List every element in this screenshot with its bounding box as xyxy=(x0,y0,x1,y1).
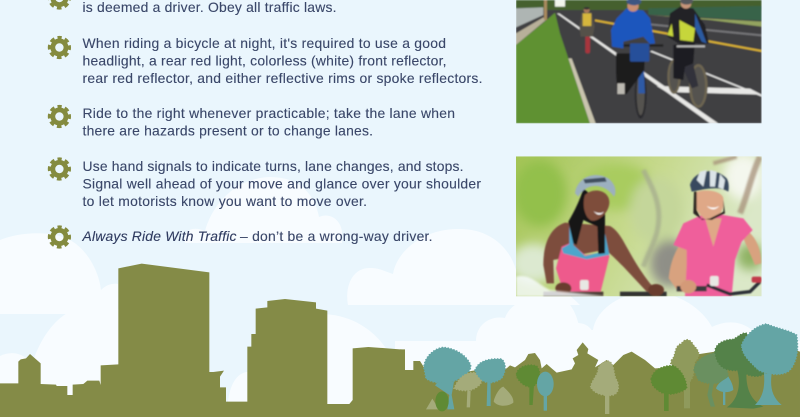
tree: teal xyxy=(475,359,505,406)
cloud fade over photo corner xyxy=(516,276,610,297)
far cyclist xyxy=(579,7,595,53)
rule 4: hand signals: Signal well ahead of your move and glance over your shoulder xyxy=(82,176,481,192)
rule 2: night riding equipment: headlight, a rear red light, colorless (white) front reflector, xyxy=(82,52,446,68)
icon: gear bullet xyxy=(49,227,69,247)
rule 4: hand signals: Use hand signals to indicate turns, lane changes, and stops. xyxy=(82,158,464,174)
rule 5: always ride with traffic: – don’t be a wrong-way driver. xyxy=(240,228,432,244)
tree: small teal xyxy=(716,377,733,405)
icon: gear bullet xyxy=(49,106,69,126)
tree: green xyxy=(517,365,540,405)
rule 4: hand signals xyxy=(49,158,481,209)
tree: olive triangle round xyxy=(494,387,513,406)
tree: large teal xyxy=(424,347,471,409)
rule 2: night riding equipment xyxy=(49,35,483,86)
tree: dark green small xyxy=(435,391,449,411)
photo: cyclists riding in a bike lane xyxy=(516,0,762,123)
rule 3: ride to the right: Ride to the right whenever practicable; take the lane when xyxy=(82,105,455,121)
tree: green round xyxy=(651,366,687,411)
bicycle: blue jacket rider xyxy=(611,0,663,119)
bicycle: reflective vest rider xyxy=(667,0,709,108)
tree: small olive triangle xyxy=(426,399,439,409)
icon: gear bullet xyxy=(49,38,69,58)
rule 3: ride to the right: there are hazards present or to change lanes. xyxy=(82,122,373,138)
text block: bicycle rules xyxy=(49,0,483,247)
rule 2: night riding equipment: When riding a bicycle at night, it's required to use a good xyxy=(82,35,446,51)
right rider xyxy=(669,170,762,296)
ground and tree-line silhouette xyxy=(400,324,800,417)
left rider xyxy=(543,175,667,296)
tree: grey-green xyxy=(694,353,728,407)
tree: teal slim xyxy=(537,372,554,411)
rule 4: hand signals: to let motorists know you want to move over. xyxy=(82,193,367,209)
tree: dark green large xyxy=(715,333,764,409)
skyline: city buildings xyxy=(0,264,405,417)
tree: light olive xyxy=(454,373,482,407)
rule 5: always ride with traffic: Always Ride With Traffic xyxy=(82,228,237,244)
rule 5: always ride with traffic xyxy=(49,227,433,247)
tree: tall olive xyxy=(671,340,699,408)
photo: two smiling women on bicycles xyxy=(510,153,763,297)
tree: pale olive xyxy=(591,361,618,414)
rule 2: night riding equipment: rear red reflector, and either reflective rims or spoke reflectors. xyxy=(82,70,482,86)
rule 3: ride to the right xyxy=(49,105,455,138)
clouds xyxy=(0,177,800,417)
icon: gear bullet xyxy=(49,0,69,8)
icon: gear bullet xyxy=(49,159,69,179)
tree: large teal foreground xyxy=(742,324,798,405)
